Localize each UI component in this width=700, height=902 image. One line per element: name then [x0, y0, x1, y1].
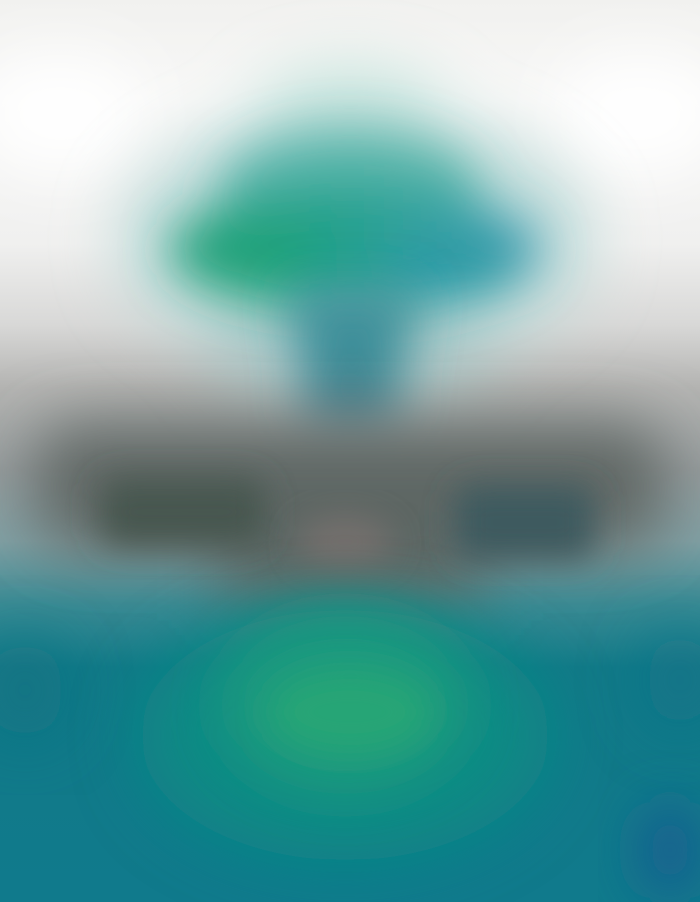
- lower green glow: [140, 610, 550, 860]
- dark band: [35, 425, 665, 605]
- blue bottom-right corner: [634, 800, 700, 900]
- top halo: [120, 70, 590, 410]
- white corner glows: [0, 55, 700, 175]
- mushroom cap: [170, 132, 540, 312]
- inner green glow: [220, 615, 470, 795]
- edge shadows in lower field: [0, 630, 700, 740]
- right dark patch: [455, 485, 595, 560]
- centre brown patch: [297, 516, 393, 568]
- mushroom stem: [290, 290, 415, 430]
- left dark patch: [100, 478, 265, 546]
- core green highlight: [270, 670, 430, 754]
